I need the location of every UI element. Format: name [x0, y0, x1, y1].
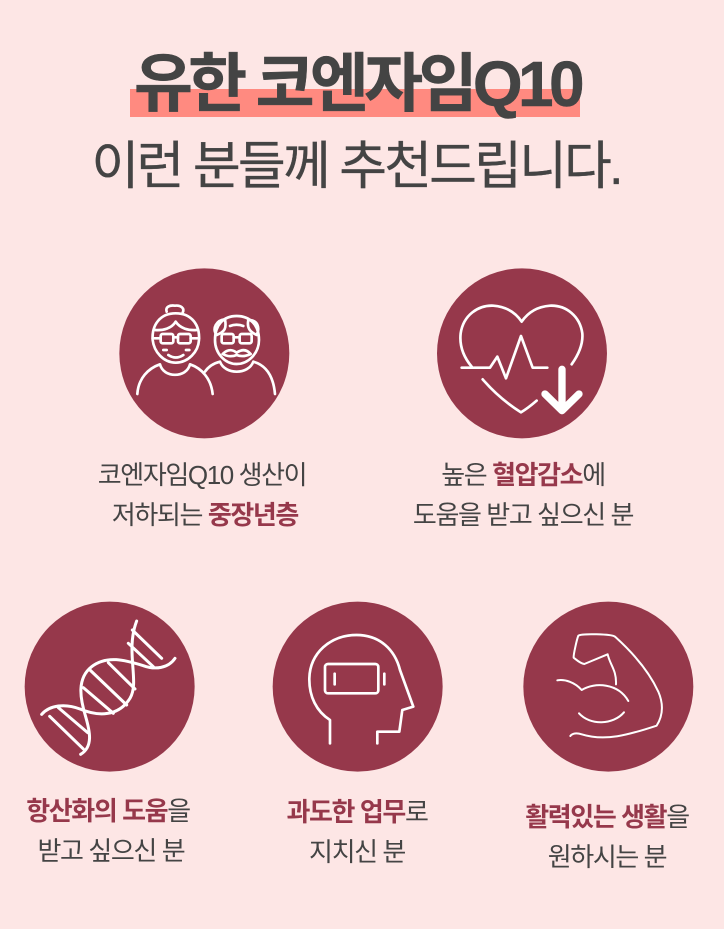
caption: vitality	[525, 802, 689, 872]
caption: antioxidant	[26, 796, 190, 866]
caption: vitality: 원하시는 분	[548, 842, 666, 872]
subtitle: 이런 분들께 추천드립니다.	[92, 138, 620, 196]
caption: blood pressure: 도움을 받고 싶으신 분	[413, 500, 633, 530]
caption: vitality: 활력있는 생활을	[525, 802, 689, 832]
caption: blood pressure: 높은 혈압감소에	[441, 460, 605, 490]
caption: overwork	[287, 797, 428, 867]
title highlight bar	[130, 89, 580, 117]
caption: middle aged	[98, 460, 306, 530]
caption: blood pressure	[413, 460, 634, 530]
icon: flexed arm	[523, 602, 693, 772]
caption: middle aged: 코엔자임Q10 생산이	[98, 460, 306, 490]
icon: DNA helix	[25, 602, 195, 772]
icon: head with low battery	[273, 602, 443, 772]
caption: overwork: 지치신 분	[309, 837, 405, 867]
caption: overwork: 과도한 업무로	[287, 797, 427, 827]
caption: antioxidant: 받고 싶으신 분	[38, 836, 184, 866]
caption: middle aged: 저하되는 중장년층	[112, 500, 298, 530]
title: 유한 코엔자임Q10	[134, 48, 580, 120]
icon: heart with pulse and down arrow	[437, 268, 607, 438]
caption: antioxidant: 항산화의 도움을	[26, 796, 190, 826]
icon: elderly couple	[119, 268, 289, 438]
